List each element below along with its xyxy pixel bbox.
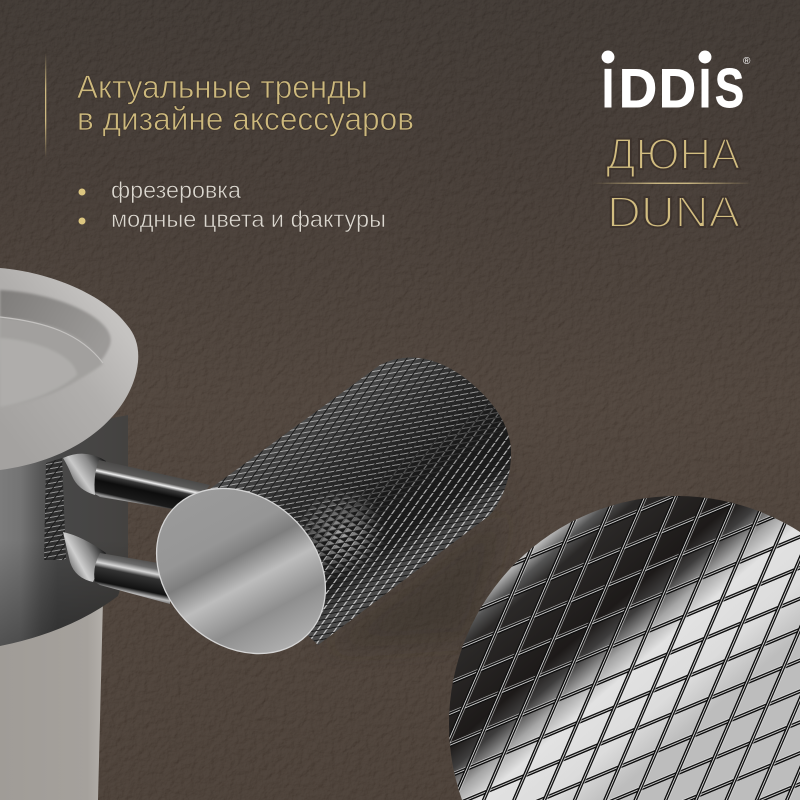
brand logo: D	[619, 57, 657, 119]
magnified texture circle	[440, 490, 800, 800]
glass tumbler body	[0, 600, 103, 800]
title	[77, 69, 414, 137]
brand logo: ®	[743, 56, 751, 67]
chrome cup holder	[0, 415, 128, 646]
knurled reflection	[44, 458, 66, 560]
collection name	[592, 130, 752, 237]
frosted cup rim	[0, 268, 138, 470]
brand logo: D	[659, 57, 696, 119]
bullet list	[78, 177, 386, 232]
title: Актуальные тренды	[77, 69, 368, 105]
lower chrome rod	[94, 553, 170, 604]
brand logo: S	[715, 57, 744, 119]
upper arm elbow	[63, 454, 106, 495]
vertical accent line	[45, 53, 46, 158]
brand logo: I	[699, 57, 711, 119]
cylinder end cap	[123, 454, 359, 688]
soft shadow of holder	[320, 450, 525, 650]
bullet two: модные цвета и фактуры	[111, 206, 386, 232]
upper chrome rod	[94, 460, 210, 512]
title: в дизайне аксессуаров	[77, 101, 414, 137]
brand logo	[602, 51, 751, 119]
collection name: ДЮНА	[606, 130, 741, 179]
bullet one: фрезеровка	[111, 177, 241, 203]
brand logo: I	[602, 57, 614, 119]
knurled cylinder	[210, 358, 511, 645]
lower arm elbow	[63, 532, 106, 582]
collection name: DUNA	[607, 188, 741, 237]
